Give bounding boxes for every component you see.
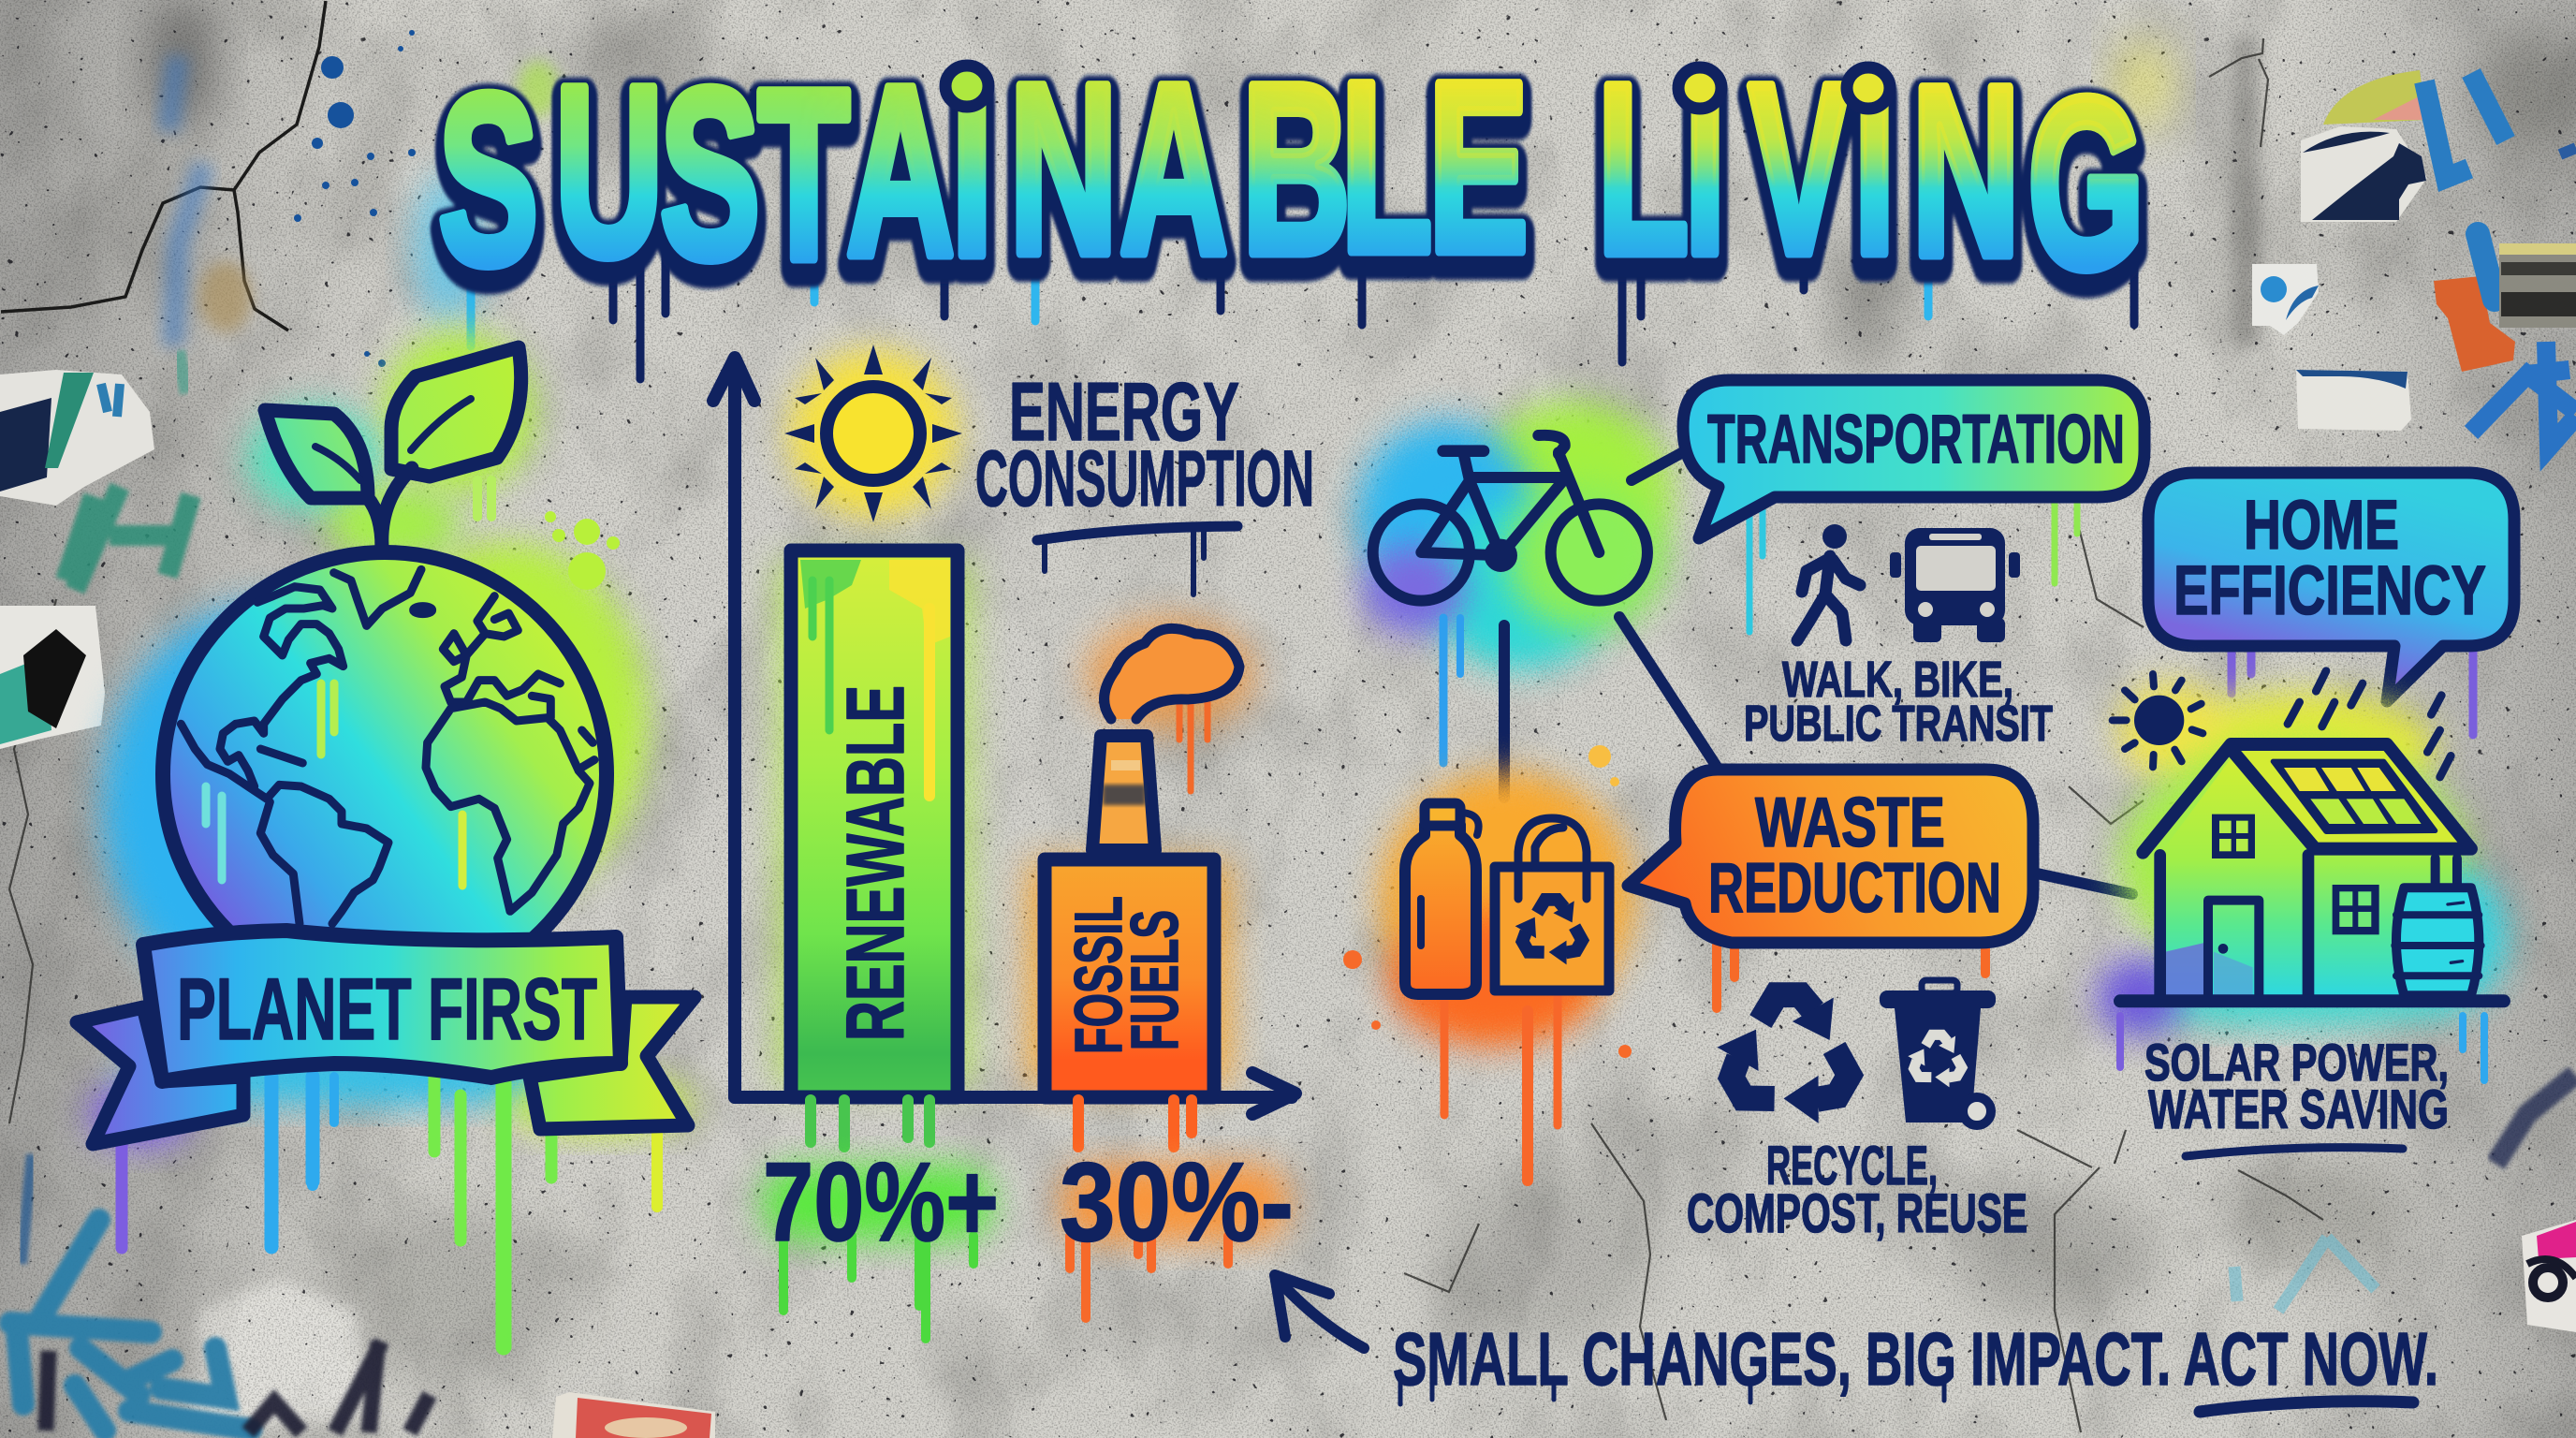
- bar: fossil fuels 30%: FUELS: [1119, 910, 1193, 1050]
- speech bubble: waste reduction: [1628, 770, 2033, 1008]
- speech bubble: home efficiency: [2148, 473, 2514, 735]
- value: 30% minus: 30%-: [1060, 1139, 1294, 1265]
- banner label: PLANET FIRST: [177, 960, 597, 1058]
- bar: renewable 70%: [777, 550, 972, 1097]
- text: walk, bike, public transit: [1744, 652, 2053, 752]
- value: 70% plus: 70%+: [763, 1139, 999, 1265]
- icon: globe with sprout: [103, 332, 646, 1006]
- text: solar power, water saving: WATER SAVING: [2148, 1079, 2449, 1140]
- title: Sustainable Living: SUSTAINABLE LIVING: [438, 32, 2144, 318]
- text: recycle, compost, reuse: COMPOST, REUSE: [1687, 1183, 2027, 1244]
- bar: renewable 70%: RENEWABLE: [830, 685, 921, 1041]
- icon: recycling arrows: [1715, 995, 1857, 1124]
- value: 70% plus: [763, 1139, 999, 1339]
- text: recycle, compost, reuse: RECYCLE,: [1766, 1136, 1938, 1196]
- text: walk, bike, public transit: PUBLIC TRANSIT: [1744, 696, 2053, 752]
- ribbon banner: Planet First: [77, 931, 695, 1347]
- text: walk, bike, public transit: WALK, BIKE,: [1782, 652, 2013, 708]
- icon: sun: [784, 345, 962, 522]
- chart title: ENERGY: [1009, 365, 1239, 458]
- title: Sustainable Living: SUSTAINABLE LIVING: [438, 41, 2144, 328]
- icon: bicycle: [1357, 403, 1671, 763]
- chart title: [975, 365, 1314, 594]
- text: recycle, compost, reuse: [1687, 1136, 2027, 1244]
- text: solar power, water saving: [2144, 1033, 2449, 1156]
- title: Sustainable Living: SUSTAINABLE LIVING: [438, 32, 2144, 318]
- arrow pointing to chart: [1275, 1275, 1364, 1348]
- speech bubble: transportation: [1683, 380, 2144, 632]
- icon: recycling bin: [1880, 980, 1996, 1125]
- text: solar power, water saving: SOLAR POWER,: [2144, 1033, 2449, 1092]
- connectors between topics: [1504, 452, 2132, 894]
- speech bubble: home efficiency: EFFICIENCY: [2174, 551, 2486, 629]
- speech bubble: waste reduction: WASTE: [1755, 783, 1945, 861]
- bar chart: energy consumption: [713, 345, 1314, 1339]
- chart axes with arrows: [713, 358, 1295, 1147]
- bar: fossil fuels 30%: [1028, 618, 1254, 1097]
- value: 30% minus: [1060, 1139, 1294, 1318]
- icon: house with solar panels and rain barrel: [2097, 671, 2506, 1080]
- speech bubble: home efficiency: HOME: [2244, 486, 2399, 564]
- icons: walker and bus: [1797, 524, 2020, 642]
- chart title: CONSUMPTION: [975, 434, 1314, 522]
- bar: fossil fuels 30%: FOSSIL: [1062, 896, 1136, 1054]
- speech bubble: waste reduction: REDUCTION: [1708, 848, 2001, 927]
- speech bubble: transportation: TRANSPORTATION: [1707, 402, 2125, 477]
- continents: [181, 569, 594, 924]
- icons: bottle and tote bag: [1343, 745, 1633, 1181]
